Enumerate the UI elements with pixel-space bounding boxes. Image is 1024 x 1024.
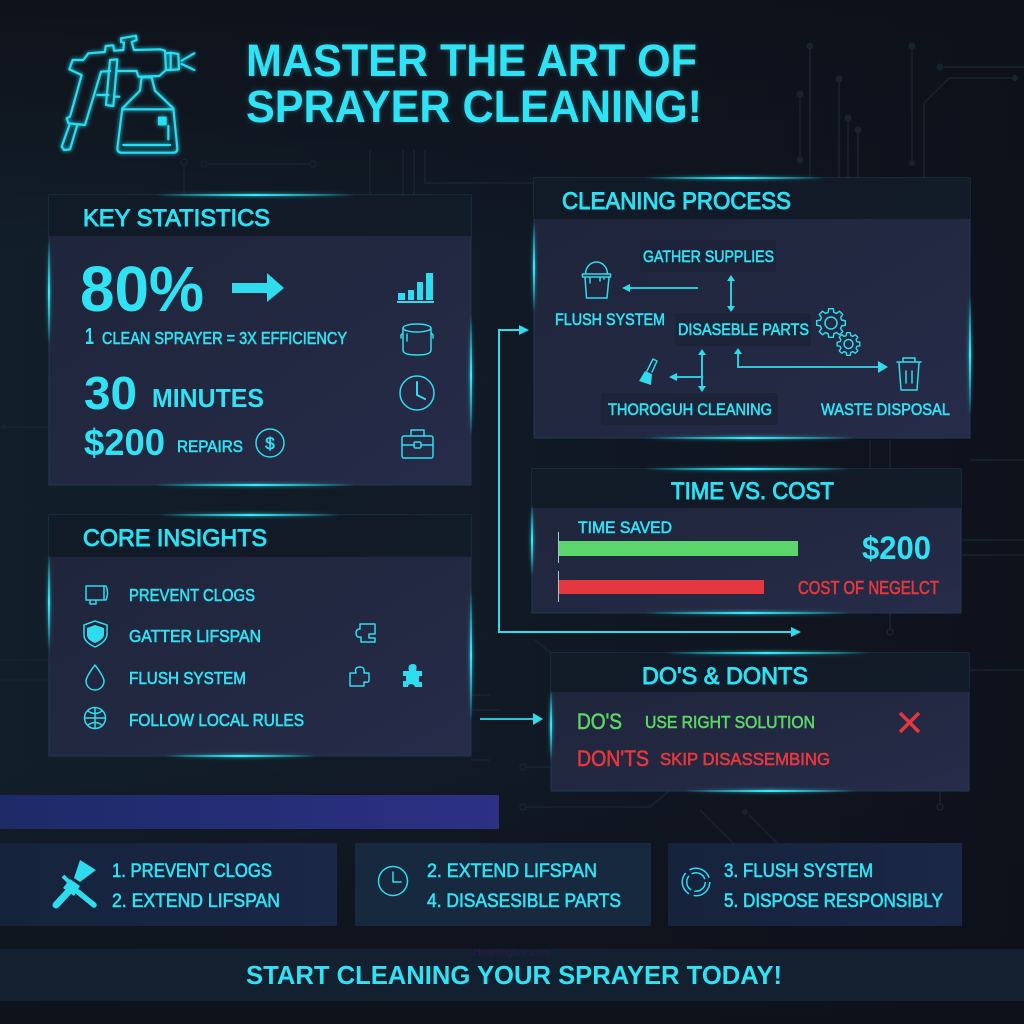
text: tip list two: 2. EXTEND LIFSPAN [427, 861, 597, 882]
row: don'ts: SKIP DISASSEMBING [660, 749, 830, 769]
panel: tip card two [355, 843, 651, 926]
arrow: connector from process to time vs cost [499, 325, 801, 637]
label: cost of neglect: COST OF NEGELCT [798, 578, 939, 598]
icon: trash can [897, 358, 921, 390]
step: gather supplies: GATHER SUPPLIES [643, 247, 774, 266]
icon: bar chart [397, 273, 434, 303]
circuit board background pattern [0, 42, 1024, 856]
insight: gatter lifspan [84, 621, 261, 647]
arrow: stat [232, 273, 284, 302]
row: don'ts: DON'TS [577, 746, 649, 771]
text: tip list three [724, 861, 943, 912]
arrow: insights to do's [480, 713, 543, 725]
stat: clean sprayer efficiency: CLEAN SPRAYER = 3X EFFICIENCY [102, 328, 347, 348]
panel: do's and don'ts [550, 652, 969, 792]
stat: 200 dollar repairs [84, 422, 243, 463]
panel: time vs cost [531, 468, 961, 614]
panel: key statistics [48, 194, 472, 486]
label: time saved: TIME SAVED [578, 518, 672, 537]
heading: key statistics: KEY STATISTICS [83, 205, 270, 232]
bar: cost of neglect [559, 580, 764, 594]
insight: prevent clogs [86, 585, 255, 605]
icon: briefcase [402, 430, 433, 458]
panel: core insights [48, 514, 472, 757]
icon: crossed tools [56, 860, 96, 905]
icon: clock [378, 866, 408, 896]
heading: cleaning process: CLEANING PROCESS [562, 188, 791, 215]
axis ticks [558, 532, 560, 602]
value: 200 dollars: $200 [862, 530, 931, 566]
text: tip list two [427, 861, 621, 912]
blue bar [0, 795, 499, 829]
icon: brush [639, 359, 657, 385]
text: tip list one: 2. EXTEND LIFSPAN [112, 891, 280, 912]
text: tip list one [112, 861, 280, 912]
stat: 30 minutes: 30 [84, 367, 137, 419]
insight: flush system: FLUSH SYSTEM [129, 668, 246, 688]
insight: follow local rules [84, 708, 304, 730]
row: do's: DO'S [577, 709, 622, 734]
bar: time saved [558, 541, 798, 556]
stat: 80 percent: 80% [80, 253, 204, 325]
stat: 30 minutes: MINUTES [152, 383, 264, 413]
text: tip list one: 1. PREVENT CLOGS [112, 861, 272, 882]
stat: clean sprayer efficiency: 1 [85, 323, 94, 349]
icon: dollar coin [256, 429, 284, 457]
step: flush system: FLUSH SYSTEM [555, 310, 665, 329]
icon: red cross [900, 713, 919, 732]
step: waste disposal: WASTE DISPOSAL [821, 400, 950, 419]
icon: puzzle outline middle [350, 667, 369, 686]
arrow: disassemble to cleaning [669, 349, 706, 392]
step: flush system [555, 262, 665, 329]
insight: follow local rules: FOLLOW LOCAL RULES [129, 710, 304, 730]
title: MASTER THE ART OF [246, 35, 697, 86]
title: SPRAYER CLEANING! [246, 81, 702, 132]
heading: time vs cost: TIME VS. COST [671, 478, 834, 505]
panel: tip card three [668, 843, 962, 926]
insight: flush system [86, 665, 246, 690]
stat: 30 minutes [84, 367, 264, 419]
arrow: supplies to disassemble [727, 275, 735, 312]
text: tip list three: 5. DISPOSE RESPONSIBLY [724, 891, 943, 912]
title [246, 35, 702, 132]
row: do's: USE RIGHT SOLUTION [645, 712, 815, 732]
heading: do's and don'ts: DO'S & DONTS [642, 663, 808, 690]
watermark: cleaningbrc.com [473, 948, 550, 959]
icon: gears [817, 309, 860, 355]
icon: puzzle outline top [356, 624, 375, 642]
step: thorough cleaning [601, 393, 778, 425]
text: tip list two: 4. DISASESIBLE PARTS [427, 891, 621, 912]
text: tip list three: 3. FLUSH SYSTEM [724, 861, 873, 882]
call to action: START CLEANING YOUR SPRAYER TODAY! [246, 960, 782, 990]
icon: dollar coin: $ [265, 434, 275, 453]
footer banner [0, 948, 1024, 1001]
step: thorough cleaning: THOROGUH CLEANING [608, 400, 772, 419]
icon: clock [400, 376, 434, 410]
icon: paint can [401, 324, 433, 355]
stat: 200 dollar repairs: $200 [84, 422, 165, 463]
arrow: supplies to flush [622, 284, 698, 292]
row: don'ts [577, 746, 830, 771]
step: gather supplies [640, 240, 776, 272]
insight: gatter lifspan: GATTER LIFSPAN [129, 626, 261, 646]
icon: puzzle filled [403, 664, 422, 687]
panel: cleaning process [533, 177, 971, 439]
step: disassemble parts [675, 313, 811, 346]
stat: 200 dollar repairs: REPAIRS [177, 437, 243, 456]
stat: clean sprayer efficiency [85, 323, 347, 349]
panel: tip card one [0, 843, 337, 926]
insight: prevent clogs: PREVENT CLOGS [129, 585, 255, 605]
arrow: disassemble to waste [734, 348, 888, 373]
step: disassemble parts: DISASEBLE PARTS [678, 320, 809, 339]
icon: spray gun with bottle [62, 36, 194, 153]
row: do's [577, 709, 815, 734]
heading: core insights: CORE INSIGHTS [83, 525, 267, 552]
icon: recycle [684, 870, 708, 894]
